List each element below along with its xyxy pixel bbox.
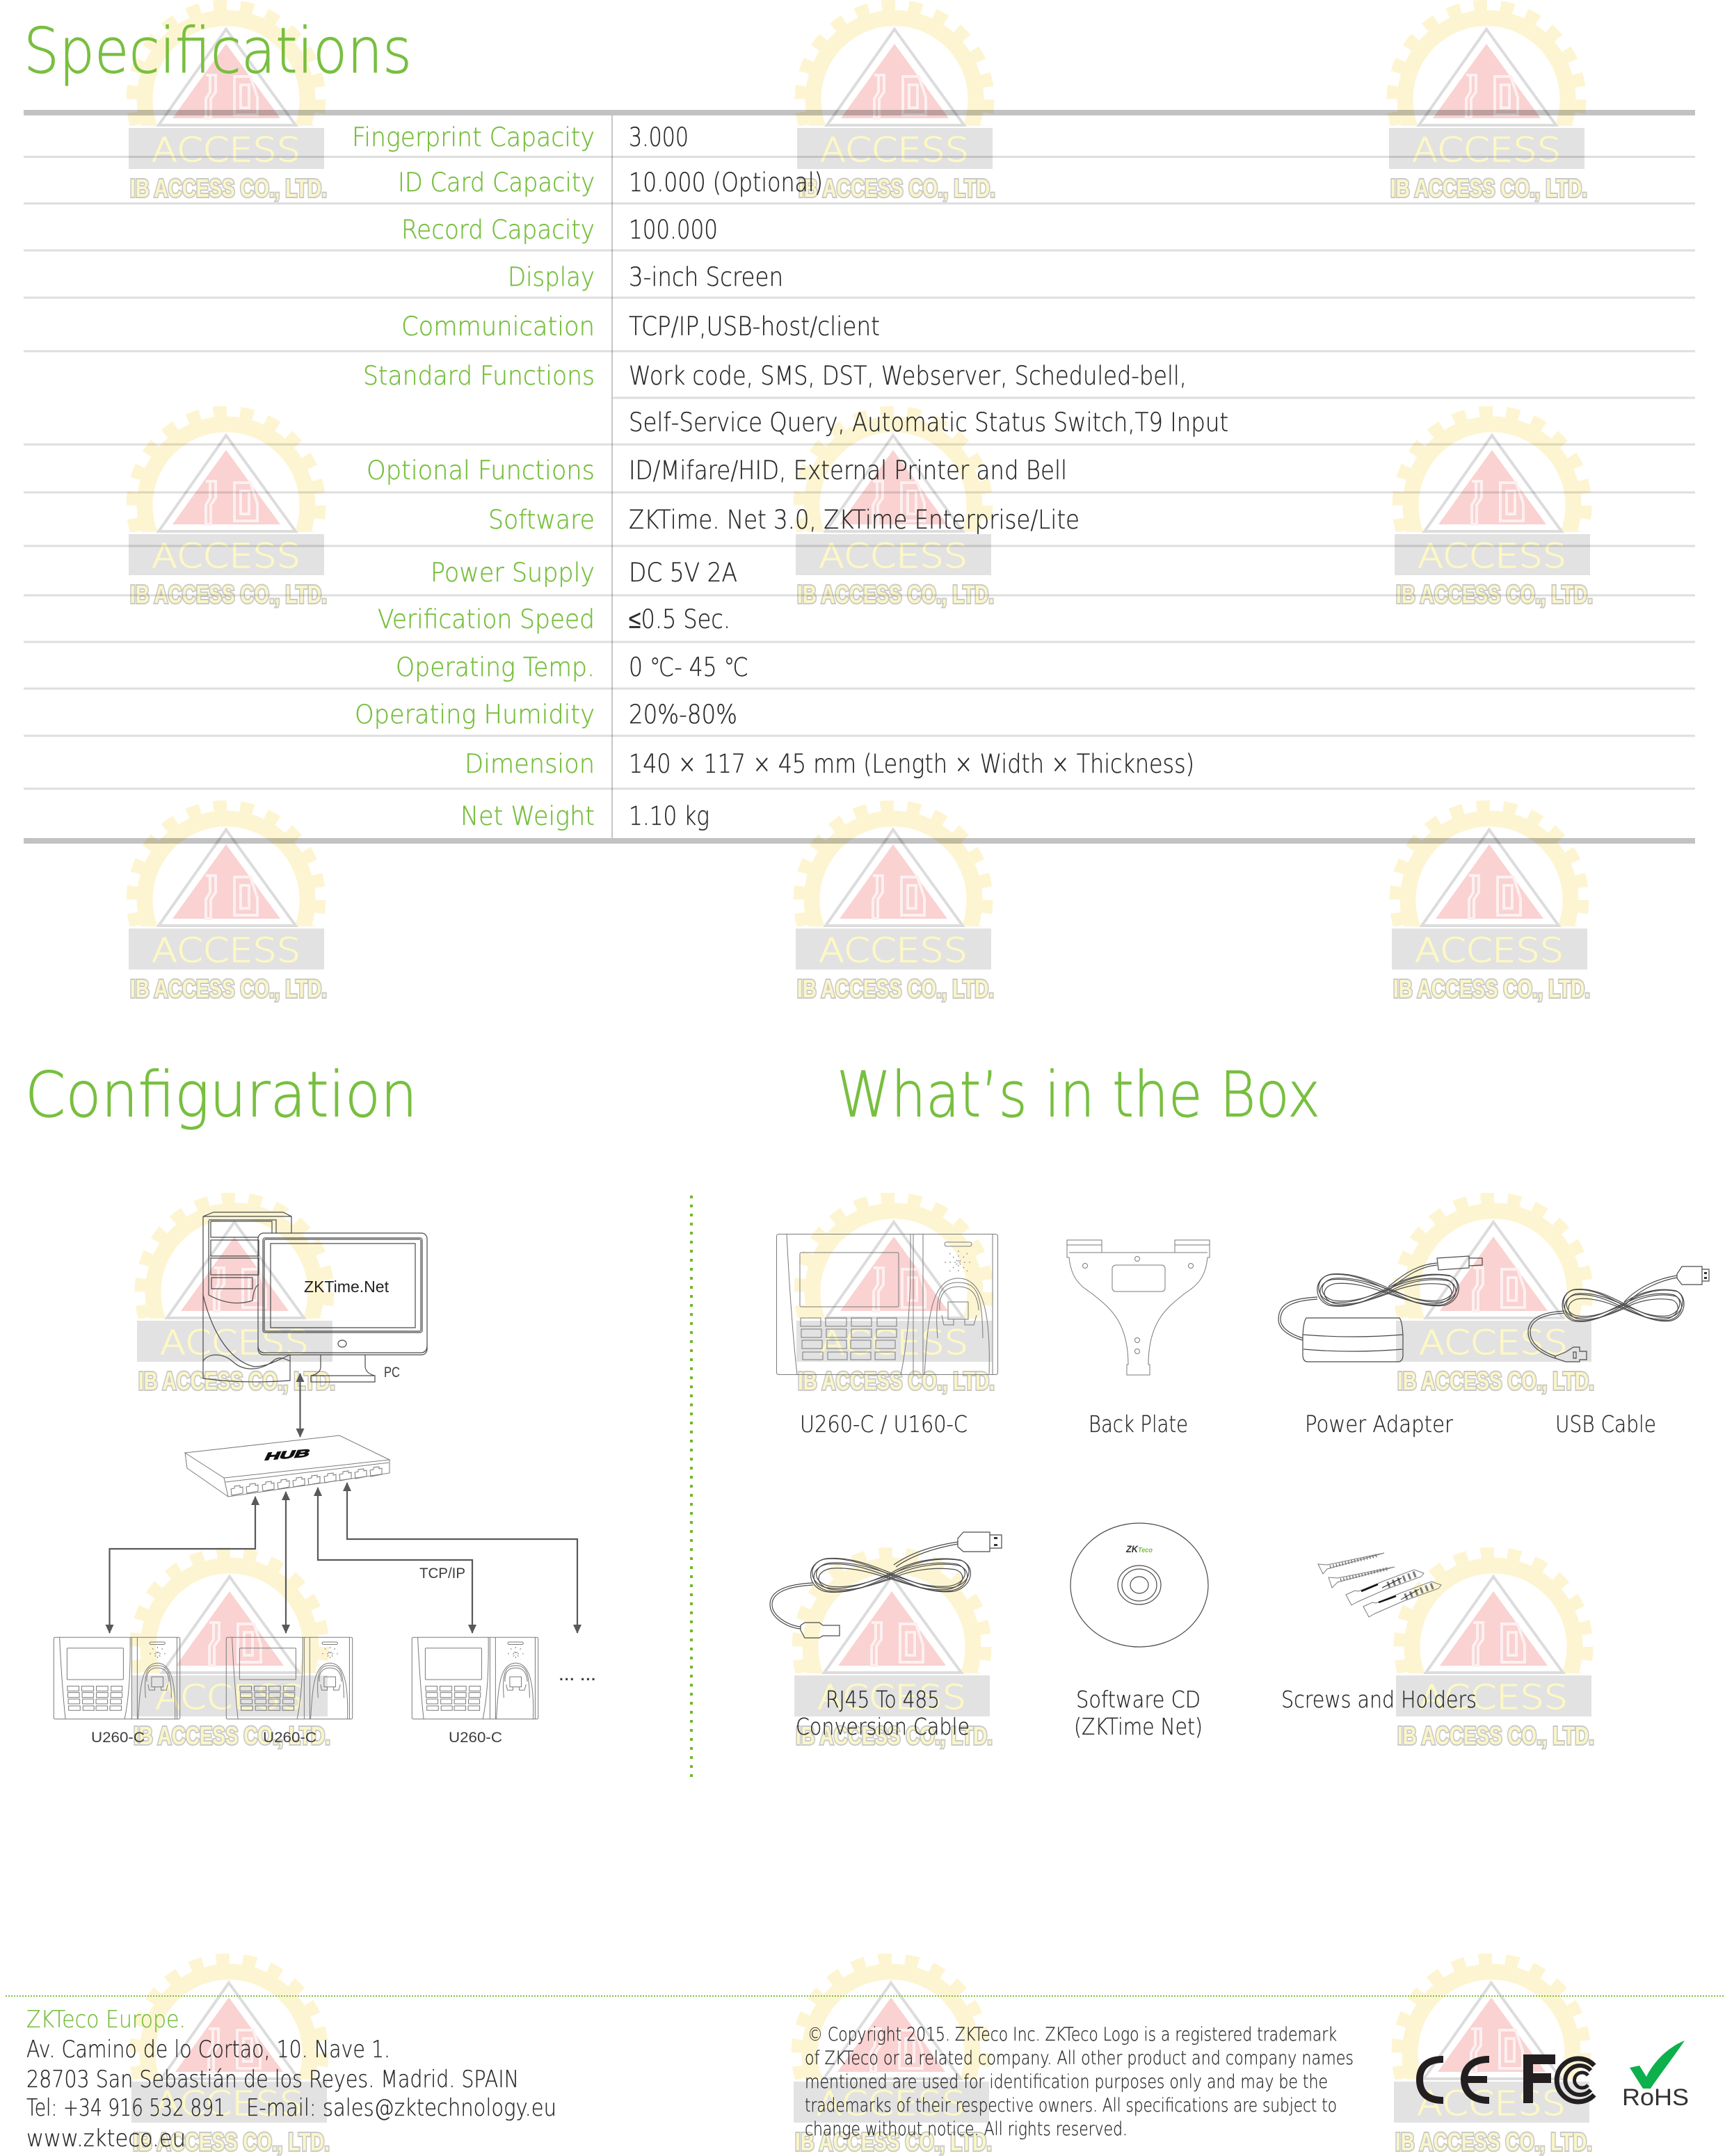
- row: Software: ZKTime. Net 3.0, ZKTime Enterprise/Lite: [629, 505, 1080, 535]
- watermark: row 1 left: [129, 6, 327, 202]
- watermark: row 1 right: [1389, 6, 1587, 202]
- watermark: row 3 left: ACCESS: [152, 931, 300, 970]
- footer: copyright notice: trademarks of their respective owners. All specifications are subject to: [805, 2095, 1337, 2116]
- item: RJ45 To 485 Conversion Cable: Conversion Cable: [796, 1713, 970, 1740]
- label: device names: [91, 1730, 502, 1746]
- label: PC: PC: [384, 1365, 400, 1381]
- watermark: row 5 centre: IB ACCESS CO., LTD.: [796, 1721, 993, 1750]
- watermark: row 1 left: IB ACCESS CO., LTD.: [130, 174, 327, 202]
- row: Verification Speed: ≤0.5 Sec.: [629, 604, 730, 634]
- row: Dimension: [465, 749, 1194, 779]
- item: USB Cable: USB Cable: [1555, 1410, 1656, 1438]
- footer: copyright notice: mentioned are used for identification purposes only and may be the: [805, 2071, 1328, 2093]
- icon: device U260-C right: [412, 1637, 538, 1719]
- watermark: row 6 centre: IB ACCESS CO., LTD.: [795, 2127, 992, 2156]
- website: www.zkteco.eu: [26, 2125, 186, 2153]
- footer: copyright notice: of ZKTeco or a related company. All other product and company names: [805, 2048, 1354, 2069]
- icon: network hub: HUB: [262, 1447, 312, 1463]
- watermark: row 4 left: ACCESS: [160, 1324, 309, 1362]
- watermark: row 5 left: [132, 1553, 330, 1750]
- panel: configuration diagram: [54, 1212, 595, 1746]
- watermark: row 2 left: IB ACCESS CO., LTD.: [130, 580, 327, 609]
- heading: Specifications: Specifications: [24, 15, 412, 88]
- watermark: row 5 right: IB ACCESS CO., LTD.: [1397, 1721, 1594, 1750]
- item: Power Adapter: Power Adapter: [1305, 1410, 1453, 1438]
- watermark: row 2 right: [1395, 412, 1593, 609]
- watermark: row 1 centre: [797, 6, 995, 202]
- row: Fingerprint Capacity: Fingerprint Capacity: [352, 122, 595, 152]
- heading: Configuration: Configuration: [25, 1059, 417, 1132]
- item: U260-C / U160-C: [776, 1234, 997, 1438]
- row: Power Supply: DC 5V 2A: [629, 558, 737, 588]
- footer: copyright notice: © Copyright 2015. ZKTeco Inc. ZKTeco Logo is a registered trademark: [808, 2024, 1337, 2045]
- watermark: row 2 centre: [796, 412, 994, 609]
- address line 1: Av. Camino de lo Cortao, 10. Nave 1.: [26, 2036, 390, 2064]
- row: Communication: TCP/IP,USB-host/client: [629, 312, 880, 341]
- watermark: row 4 right: [1396, 1198, 1594, 1395]
- row: Operating Temp.: 0 ℃- 45 ℃: [629, 652, 748, 682]
- row: Operating Temp.: Operating Temp.: [396, 652, 595, 682]
- footer: copyright notice: [805, 2024, 1354, 2140]
- item: Software CD: [1070, 1523, 1208, 1740]
- row: Record Capacity: Record Capacity: [401, 215, 595, 245]
- watermark: row 6 right: IB ACCESS CO., LTD.: [1395, 2127, 1592, 2156]
- watermark: row 2 right: ACCESS: [1418, 537, 1566, 576]
- label: TCP/IP: TCP/IP: [419, 1566, 465, 1582]
- row: Standard Functions: Standard Functions: [363, 361, 595, 391]
- icon: monitor with ZKTime.Net screen: ZKTime.Net: [304, 1278, 390, 1296]
- watermark: row 5 centre: ACCESS: [817, 1678, 966, 1717]
- item: Power Adapter: [1278, 1256, 1482, 1438]
- watermark: row 6 right: ACCESS: [1417, 2084, 1566, 2123]
- item: Software CD: ZKTeco: [1125, 1543, 1153, 1554]
- item: RJ45 To 485 Conversion Cable: [770, 1532, 1002, 1740]
- watermark: row 1 left: ACCESS: [152, 131, 300, 170]
- row: Software: Software: [488, 505, 595, 535]
- arrow: hub to device 2: [285, 1492, 287, 1633]
- icon: monitor with ZKTime.Net screen: [258, 1233, 427, 1382]
- row: Record Capacity: 100.000: [629, 215, 718, 245]
- arrow: PC to hub: [299, 1374, 301, 1437]
- heading: What's in the Box: What’s in the Box: [837, 1059, 1320, 1132]
- arrow: hub to further devices: [347, 1483, 577, 1633]
- row: Standard Functions: [363, 361, 1228, 437]
- watermark: row 3 right: [1392, 806, 1590, 1003]
- row: Power Supply: [431, 558, 737, 588]
- row: Communication: Communication: [401, 312, 595, 341]
- row: Display: [508, 262, 783, 292]
- logo: CE mark: [1420, 2059, 1489, 2100]
- watermark: row 3 left: [129, 806, 327, 1003]
- watermark: row 3 centre: IB ACCESS CO., LTD.: [797, 974, 994, 1003]
- row: Dimension: Dimension: [465, 749, 595, 779]
- watermark: row 1 right: IB ACCESS CO., LTD.: [1390, 174, 1587, 202]
- logo: FCC mark: [1528, 2059, 1594, 2103]
- row: Optional Functions: Optional Functions: [367, 456, 595, 485]
- row: Operating Humidity: 20%-80%: [629, 700, 737, 730]
- row: ID Card Capacity: ID Card Capacity: [398, 168, 595, 198]
- watermark: row 4 centre: ACCESS: [819, 1324, 968, 1362]
- row: Power Supply: Power Supply: [431, 558, 595, 588]
- divider: footer dotted line: [6, 1995, 1725, 1997]
- watermark: row 2 centre: IB ACCESS CO., LTD.: [797, 580, 994, 609]
- row: Verification Speed: Verification Speed: [378, 604, 595, 634]
- item: Screws and Holders: Screws and Holders: [1281, 1686, 1477, 1713]
- icon: PC tower: [203, 1212, 291, 1382]
- row: Fingerprint Capacity: 3.000: [629, 122, 689, 152]
- watermark: row 1 right: ACCESS: [1412, 131, 1561, 170]
- watermark: row 6 right: [1394, 1959, 1592, 2156]
- watermark: row 3 right: ACCESS: [1415, 931, 1564, 970]
- watermark: row 4 left: [137, 1198, 335, 1395]
- item: RJ45 To 485 Conversion Cable: RJ45 To 485: [826, 1686, 940, 1713]
- watermark: row 3 centre: [796, 806, 994, 1003]
- icon: device U260-C middle: [226, 1637, 353, 1719]
- label: device names: U260-C: [91, 1730, 145, 1746]
- row: Verification Speed: [378, 604, 730, 634]
- address line 2: 28703 San Sebastián de los Reyes. Madrid. SPAIN: [26, 2066, 519, 2093]
- watermark: row 1 centre: IB ACCESS CO., LTD.: [799, 174, 995, 202]
- footer: copyright notice: change without notice. All rights reserved.: [805, 2118, 1128, 2140]
- watermark: row 6 left: IB ACCESS CO., LTD.: [133, 2127, 330, 2156]
- label: device names: U260-C: [263, 1730, 316, 1746]
- watermark: row 6 left: ACCESS: [154, 2084, 303, 2123]
- watermark: row 4 centre: [796, 1198, 995, 1395]
- watermark: row 3 centre: ACCESS: [819, 931, 968, 970]
- phone and email: Tel: +34 916 532 891: [26, 2094, 225, 2122]
- watermark: row 4 left: IB ACCESS CO., LTD.: [138, 1367, 335, 1395]
- panel: specifications table: [24, 110, 1695, 844]
- watermark: row 2 left: ACCESS: [152, 537, 300, 576]
- row: Operating Humidity: Operating Humidity: [355, 700, 595, 730]
- row: Net Weight: [460, 801, 709, 831]
- watermark: row 5 left: IB ACCESS CO., LTD.: [134, 1721, 330, 1750]
- label: device names: U260-C: [449, 1730, 502, 1746]
- panel: what's in the box: [770, 1234, 1709, 1740]
- watermark: row 5 right: ACCESS: [1419, 1678, 1568, 1717]
- row: Standard Functions: Self-Service Query, Automatic Status Switch,T9 Input: [629, 408, 1228, 437]
- watermark: row 5 centre: [794, 1553, 993, 1750]
- row: Display: Display: [508, 262, 595, 292]
- row: Record Capacity: [401, 215, 718, 245]
- item: USB Cable: [1528, 1266, 1709, 1438]
- row: Software: [488, 505, 1080, 535]
- watermark: row 5 right: [1396, 1553, 1594, 1750]
- label: ellipsis: ... ...: [559, 1668, 595, 1684]
- row: Operating Humidity: [355, 700, 737, 730]
- watermark: row 6 centre: [794, 1959, 992, 2156]
- row: Net Weight: 1.10 kg: [629, 801, 709, 831]
- watermark: row 4 right: ACCESS: [1419, 1324, 1568, 1362]
- watermark: row 3 left: IB ACCESS CO., LTD.: [130, 974, 327, 1003]
- watermark: row 2 right: IB ACCESS CO., LTD.: [1396, 580, 1593, 609]
- company name: ZKTeco Europe.: [26, 2006, 186, 2034]
- arrow: hub to device 1: [110, 1497, 255, 1633]
- row: Net Weight: Net Weight: [460, 801, 595, 831]
- logo: RoHS check: [1622, 2041, 1689, 2111]
- phone and email: [26, 2094, 556, 2122]
- icon: network hub: [185, 1435, 390, 1497]
- row: Communication: [401, 312, 880, 341]
- divider: dotted vertical: [690, 1196, 693, 1779]
- watermark: row 2 left: [129, 412, 327, 609]
- phone and email: E-mail: sales@zktechnology.eu: [246, 2094, 556, 2122]
- item: U260-C / U160-C: U260-C / U160-C: [800, 1410, 968, 1438]
- watermark: row 2 centre: ACCESS: [819, 537, 968, 576]
- item: Software CD: Software CD: [1076, 1686, 1201, 1713]
- row: Dimension: 140 × 117 × 45 mm (Length × Width × Thickness): [629, 749, 1194, 779]
- arrow: hub to device 3: [318, 1488, 472, 1633]
- item: Screws and Holders: [1281, 1553, 1477, 1713]
- footer: contact details: [26, 2006, 556, 2153]
- watermark: row 6 centre: ACCESS: [817, 2084, 965, 2123]
- row: Optional Functions: ID/Mifare/HID, External Printer and Bell: [629, 456, 1067, 485]
- watermark: row 4 right: IB ACCESS CO., LTD.: [1397, 1367, 1594, 1395]
- row: ID Card Capacity: 10.000 (Optional): [629, 168, 823, 198]
- logo: RoHS check: RoHS: [1622, 2084, 1689, 2111]
- item: Back Plate: [1067, 1240, 1210, 1438]
- row: ID Card Capacity: [398, 168, 823, 198]
- watermark: row 4 centre: IB ACCESS CO., LTD.: [798, 1367, 995, 1395]
- icon: device U260-C left: [54, 1637, 180, 1719]
- row: Optional Functions: [367, 456, 1067, 485]
- watermark: row 5 left: ACCESS: [155, 1678, 304, 1717]
- row: Standard Functions: Work code, SMS, DST, Webserver, Scheduled-bell,: [629, 361, 1187, 391]
- item: Software CD: (ZKTime Net): [1074, 1713, 1203, 1740]
- watermark: row 1 centre: ACCESS: [820, 131, 969, 170]
- row: Display: 3-inch Screen: [629, 262, 783, 292]
- item: Back Plate: Back Plate: [1089, 1410, 1188, 1438]
- row: Operating Temp.: [396, 652, 748, 682]
- watermark: row 3 right: IB ACCESS CO., LTD.: [1393, 974, 1590, 1003]
- watermark: row 6 left: [131, 1959, 330, 2156]
